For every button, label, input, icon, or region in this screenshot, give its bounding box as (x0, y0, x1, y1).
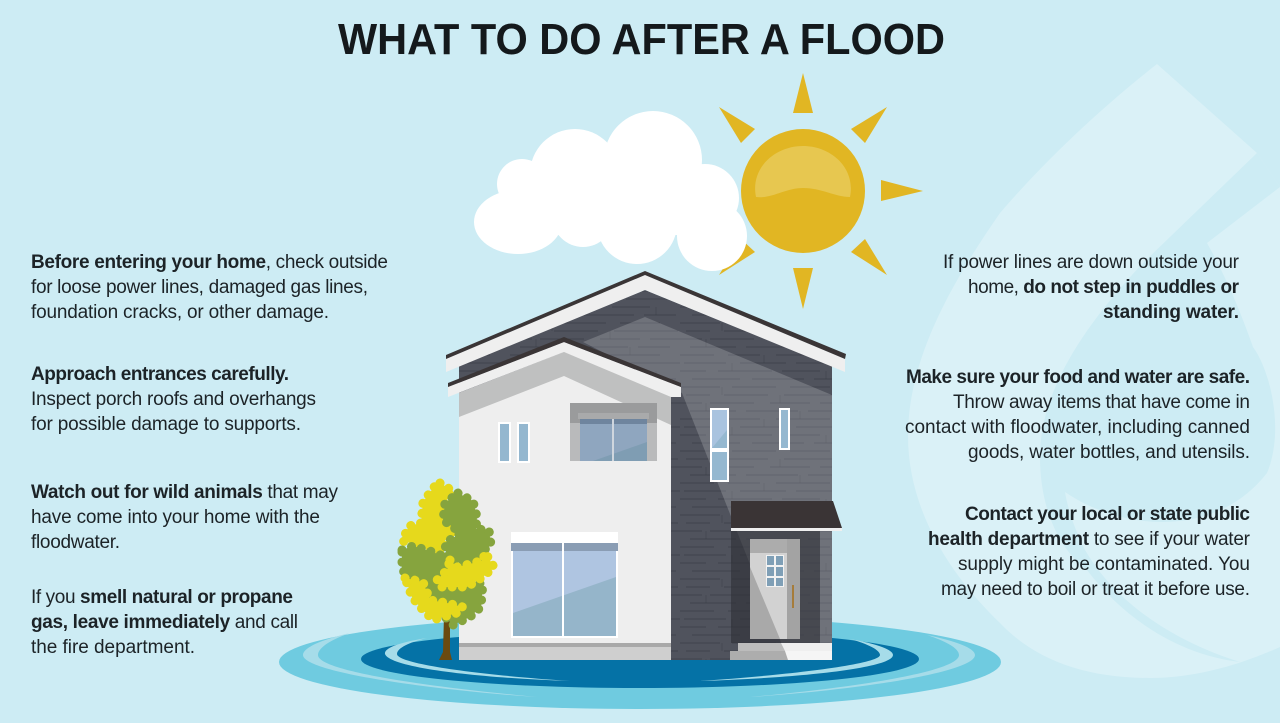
porch awning (731, 501, 842, 531)
text: right column, health department (928, 504, 1251, 600)
title: WHAT TO DO AFTER A FLOOD (338, 15, 945, 64)
text: right column, health department: may need to boil or treat it before use. (941, 579, 1250, 600)
green foliage top (443, 493, 491, 570)
text: left column, before entering: Before entering your home, check outside (31, 252, 388, 273)
text: left column, approach entrances: Approach entrances carefully. (31, 364, 289, 385)
sun rays (719, 73, 923, 309)
icon: cloud (474, 111, 747, 271)
yellow foliage lower (405, 578, 463, 620)
text: right column, health department: supply might be contaminated. You (958, 554, 1250, 575)
text: right column, power lines (943, 252, 1240, 323)
main roof (446, 271, 846, 372)
door (750, 539, 800, 639)
text: right column, power lines: If power lines are down outside your (943, 252, 1240, 273)
text: right column, power lines: standing water. (1103, 302, 1239, 323)
water puddle (279, 615, 1001, 709)
small window on brick wall (779, 408, 790, 450)
sun highlight (755, 146, 851, 197)
text: left column, approach entrances (31, 364, 316, 435)
text: left column, before entering: foundation cracks, or other damage. (31, 302, 329, 323)
porch recess (731, 531, 820, 643)
icon: sun (719, 73, 923, 309)
text: right column, power lines: home, do not step in puddles or (968, 277, 1240, 298)
text: left column, wild animals (31, 482, 338, 553)
text: right column, food and water (905, 367, 1250, 463)
text: left column, approach entrances: Inspect porch roofs and overhangs (31, 389, 316, 410)
text: right column, health department: Contact your local or state public (965, 504, 1250, 525)
text: left column, gas smell (31, 587, 298, 658)
outer ripple highlights (303, 633, 975, 697)
text: right column, food and water: goods, water bottles, and utensils. (968, 442, 1250, 463)
upstairs large window (570, 403, 657, 461)
brick wall (459, 290, 832, 660)
text: right column, food and water: Make sure your food and water are safe. (906, 367, 1250, 388)
text: left column, wild animals: Watch out for wild animals that may (31, 482, 338, 503)
sunlit wall area (583, 317, 832, 660)
upstairs window left pair (498, 422, 530, 463)
yellow foliage top (402, 483, 461, 553)
green foliage lower (402, 546, 483, 625)
text: right column, food and water: contact with floodwater, including canned (905, 417, 1250, 438)
porch steps (730, 643, 832, 660)
base band (459, 643, 671, 660)
text: left column, before entering (31, 252, 388, 323)
text: right column, food and water: Throw away items that have come in (953, 392, 1250, 413)
text: right column, health department: health department to see if your water (928, 529, 1251, 550)
white front wall (459, 352, 671, 660)
text: left column, wild animals: floodwater. (31, 532, 120, 553)
text: left column, before entering: for loose power lines, damaged gas lines, (31, 277, 368, 298)
background water drop watermark (908, 64, 1280, 678)
trunk (439, 615, 452, 660)
gable shadow (459, 352, 671, 425)
ground floor sliding window (511, 532, 618, 638)
text: left column, gas smell: If you smell natural or propane (31, 587, 293, 608)
inner ripple highlights (385, 638, 893, 681)
text: left column, wild animals: have come into your home with the (31, 507, 320, 528)
text: left column, gas smell: the fire department. (31, 637, 195, 658)
tall window on brick wall (710, 408, 729, 482)
text: left column, approach entrances: for possible damage to supports. (31, 414, 301, 435)
text: left column, gas smell: gas, leave immediately and call (31, 612, 298, 633)
front gable roof (448, 337, 681, 397)
house (446, 271, 846, 660)
tree (402, 483, 494, 660)
yellow foliage middle (437, 552, 494, 587)
